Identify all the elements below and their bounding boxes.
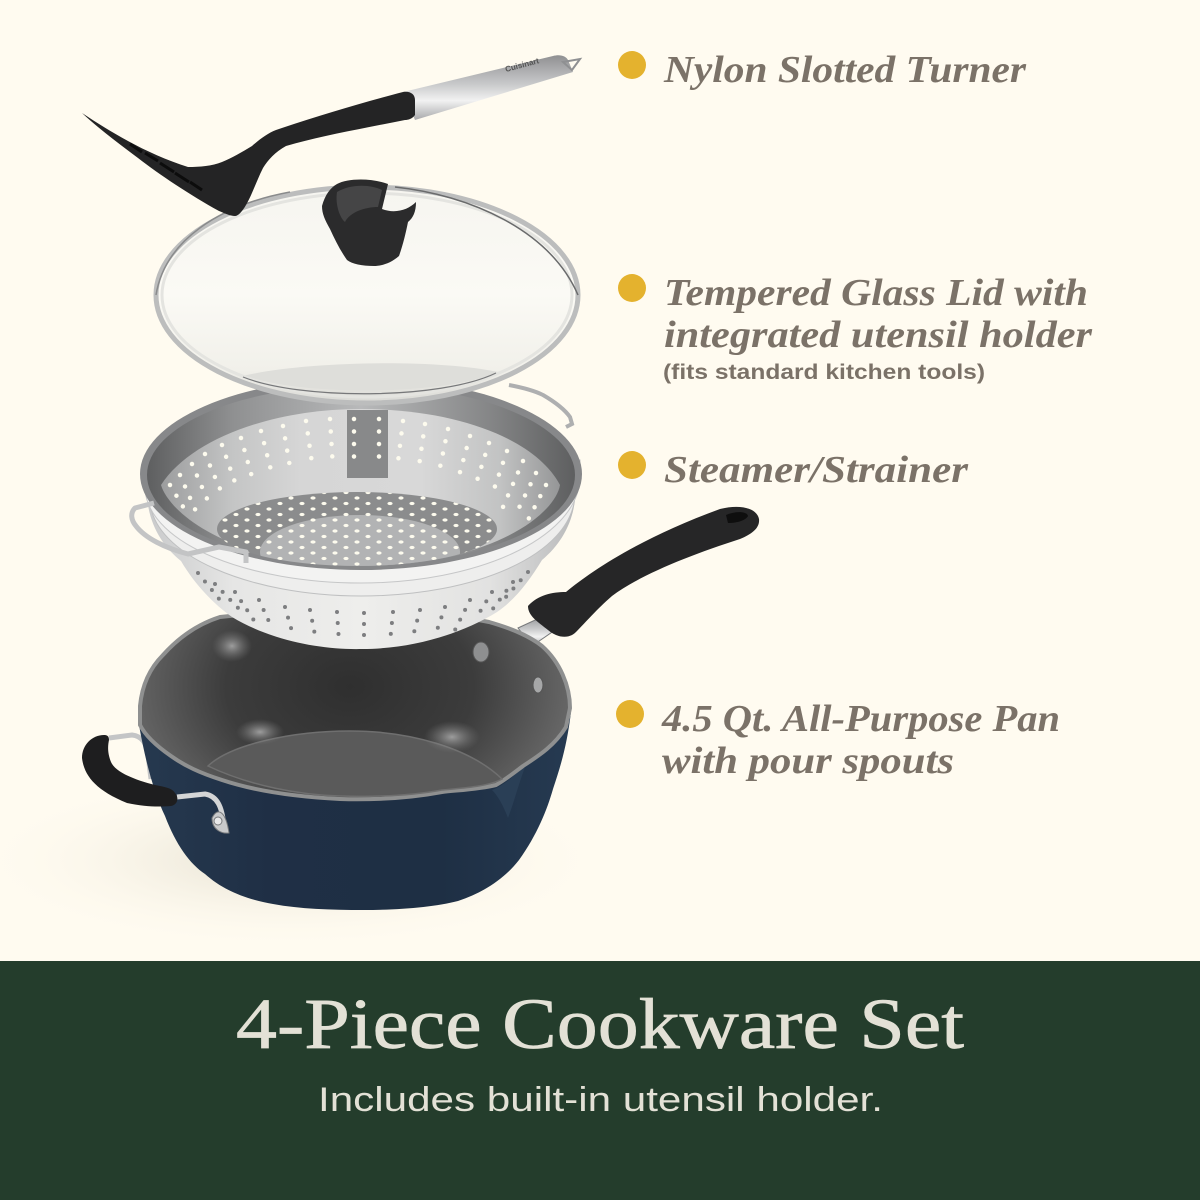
back wall band xyxy=(147,385,575,565)
icon: slotted turner: Cuisinart xyxy=(504,56,540,74)
near handle xyxy=(132,503,246,563)
label: all-purpose pan xyxy=(616,698,1060,782)
icon: steamer strainer xyxy=(132,378,582,649)
label: tempered glass lid: integrated utensil holder xyxy=(664,314,1093,356)
subtitle: Includes built-in utensil holder. xyxy=(318,1081,883,1119)
interior highlights xyxy=(212,630,252,662)
icon: all-purpose pan xyxy=(82,507,759,910)
long handle xyxy=(518,507,759,646)
label: tempered glass lid: (fits standard kitchen tools) xyxy=(663,361,985,384)
bowl perforations xyxy=(198,572,528,644)
knob xyxy=(322,180,416,266)
base xyxy=(217,492,497,566)
label: tempered glass lid xyxy=(618,272,1093,384)
rivets xyxy=(473,642,489,662)
label: nylon slotted turner: Nylon Slotted Turner xyxy=(663,49,1027,91)
pan shadow xyxy=(0,770,610,950)
base inner disc xyxy=(222,492,492,566)
side handle xyxy=(82,735,229,833)
bottom banner xyxy=(0,961,1200,1200)
navy body xyxy=(138,712,571,910)
wall perforations xyxy=(170,419,546,520)
label: steamer strainer: Steamer/Strainer xyxy=(664,449,969,491)
label: all-purpose pan: 4.5 Qt. All-Purpose Pan xyxy=(661,698,1060,740)
title: 4-Piece Cookware Set xyxy=(236,984,964,1064)
far handle xyxy=(509,385,572,427)
label: all-purpose pan: with pour spouts xyxy=(662,740,954,782)
outer bowl xyxy=(148,470,575,649)
icon: glass lid xyxy=(156,180,578,403)
lower rim bands xyxy=(150,470,575,596)
rim xyxy=(140,378,582,570)
pan floor xyxy=(208,731,502,796)
dark strip reflection xyxy=(347,410,388,478)
perforated inner wall xyxy=(161,409,560,566)
upper side handle bracket xyxy=(109,735,151,779)
pour spout xyxy=(492,762,527,818)
icon: slotted turner xyxy=(82,55,580,216)
rim and interior xyxy=(140,611,570,799)
label: tempered glass lid: Tempered Glass Lid with xyxy=(664,272,1088,314)
